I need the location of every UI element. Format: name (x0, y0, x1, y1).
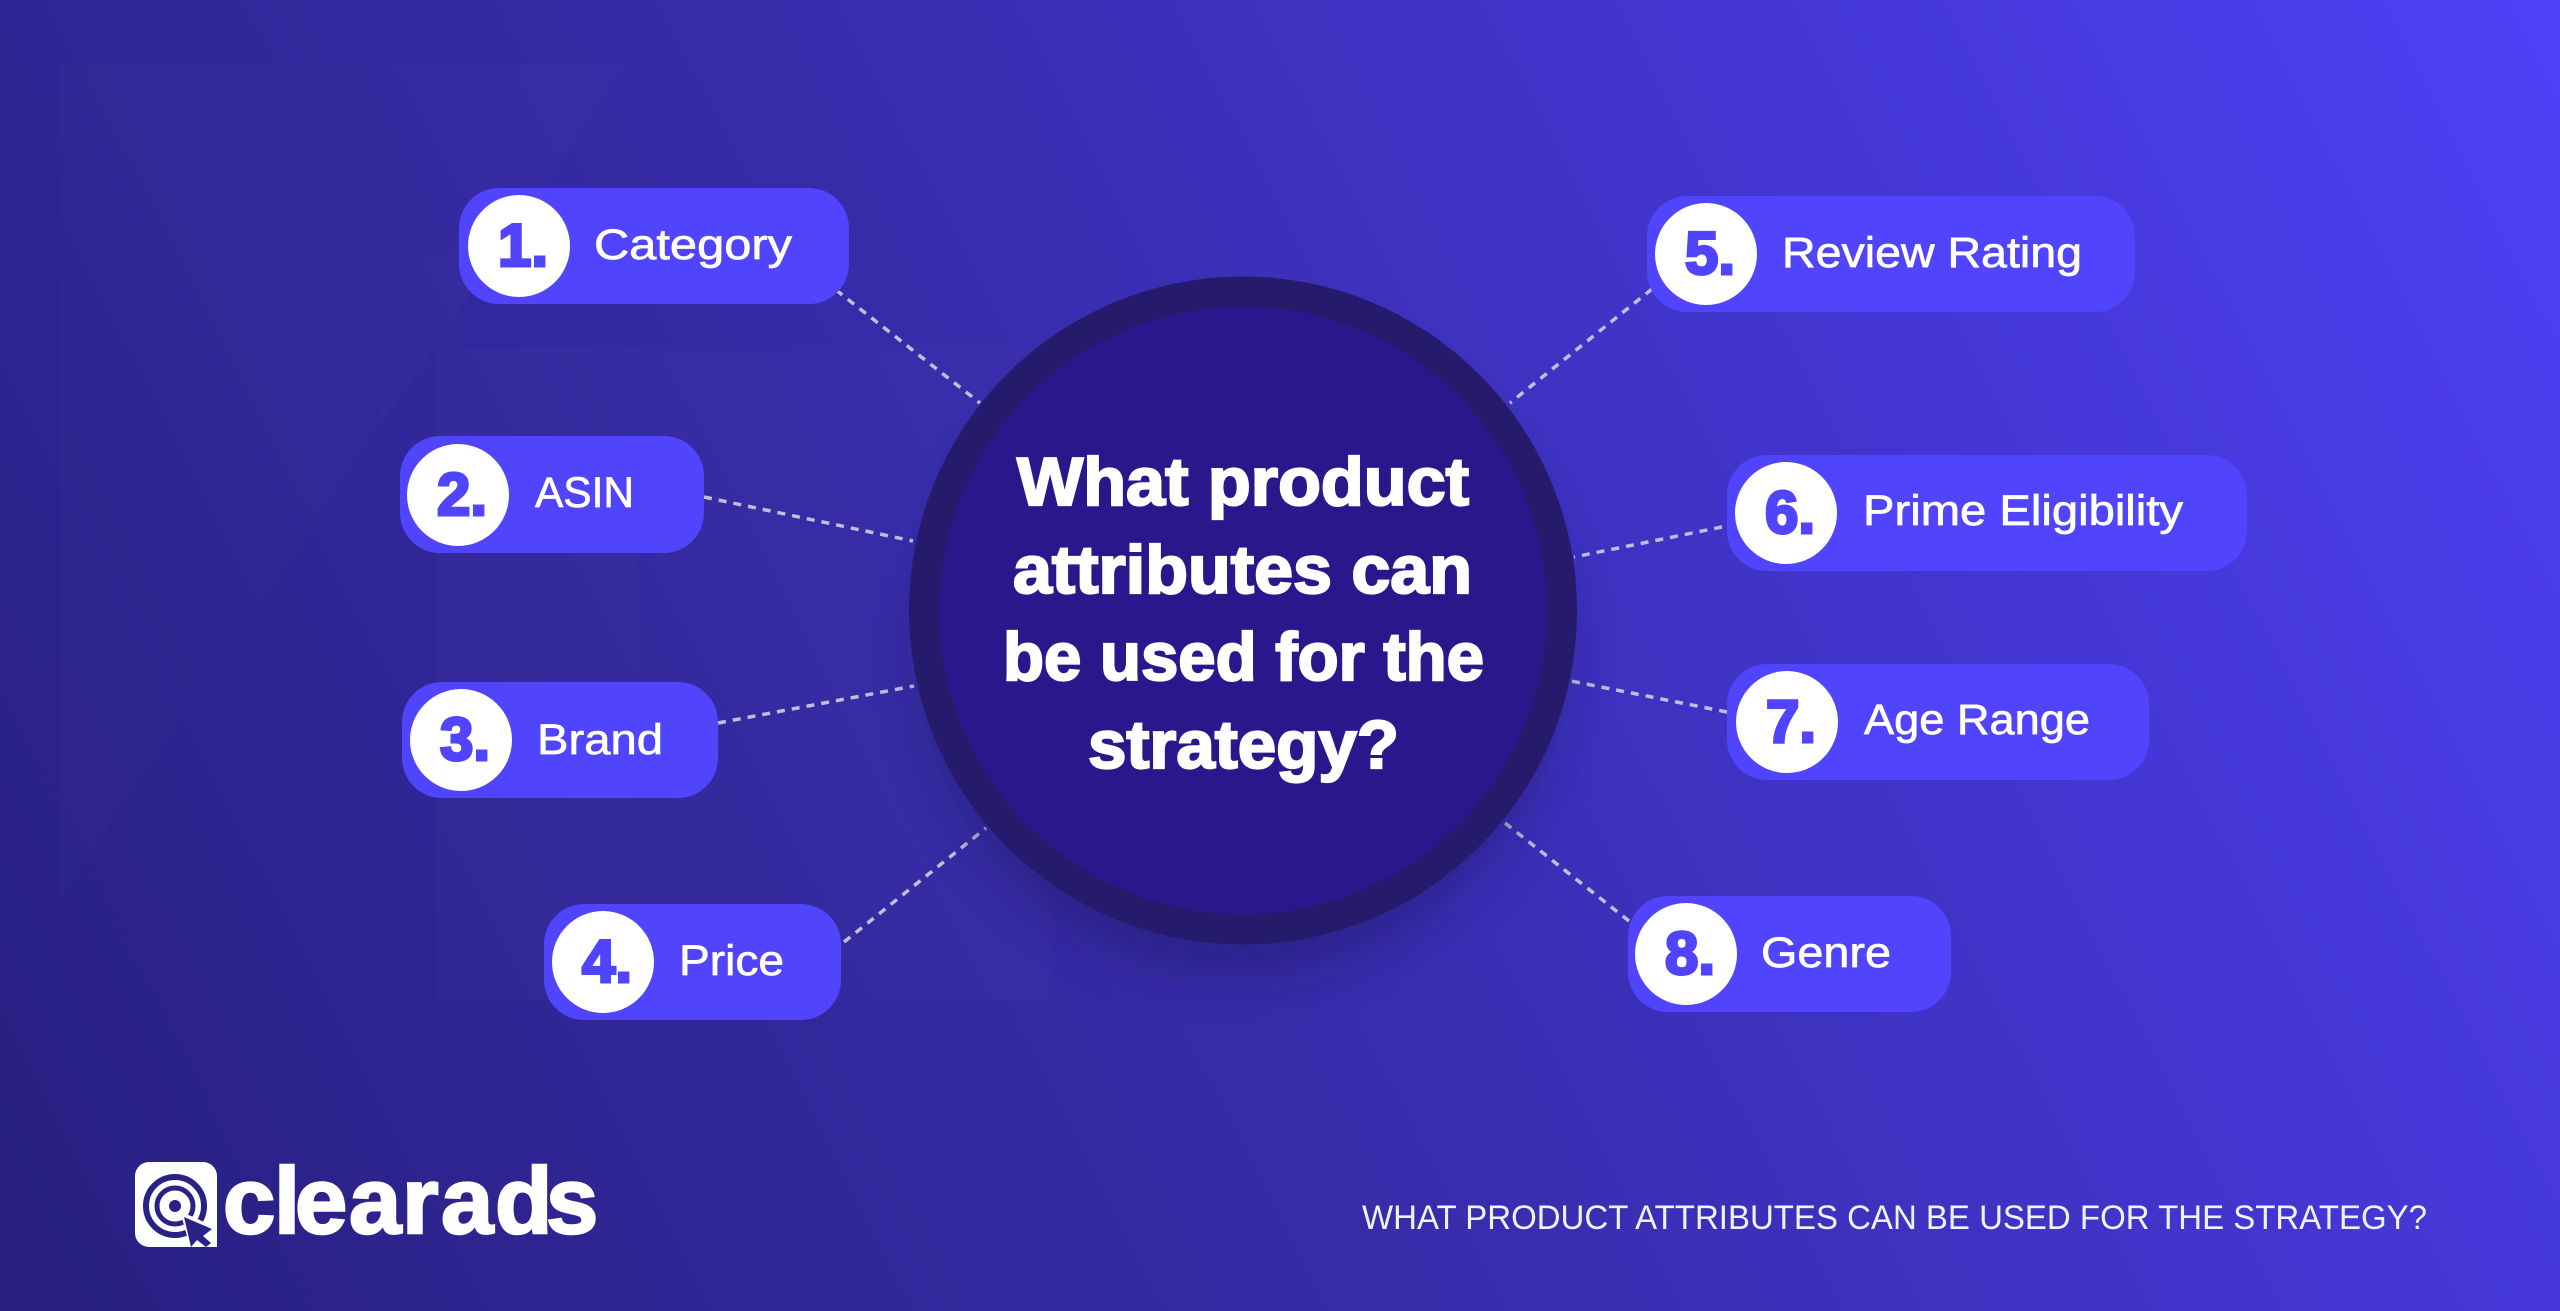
pill 1: Category: Category (594, 221, 793, 269)
dashed connectors (704, 289, 1727, 942)
logo (135, 1148, 598, 1253)
central title (1003, 444, 1484, 783)
central title: attributes can (1013, 532, 1472, 608)
background watermark shapes (60, 65, 1050, 1000)
pill 5: Review Rating: Review Rating (1782, 229, 2082, 277)
pill 7: Age Range: Age Range (1864, 696, 2090, 744)
central title: What product (1017, 444, 1469, 520)
footer caption: WHAT PRODUCT ATTRIBUTES CAN BE USED FOR THE STRATEGY? (1362, 1199, 2427, 1237)
pill 8: Genre (1628, 896, 1951, 1012)
pill 6: Prime Eligibility (1727, 455, 2247, 571)
pill 2: ASIN (400, 436, 704, 553)
wordmark: clearads (223, 1148, 598, 1253)
pill 5: Review Rating: 5. (1685, 220, 1735, 287)
pill 2: ASIN: 2. (437, 461, 487, 528)
pill 5: Review Rating (1647, 196, 2135, 312)
icon: target with cursor (135, 1162, 217, 1247)
pill 6: Prime Eligibility: 6. (1765, 479, 1815, 546)
pill 7: Age Range (1727, 664, 2149, 780)
pill 4: Price: Price (679, 937, 784, 985)
pill 2: ASIN: ASIN (535, 469, 634, 517)
central circle (909, 276, 1577, 973)
pill 1: Category (459, 188, 849, 304)
pill 3: Brand (402, 682, 718, 798)
pill 4: Price (544, 904, 841, 1020)
central title: be used for the (1003, 619, 1484, 695)
pill 3: Brand: Brand (537, 716, 663, 764)
pill 4: Price: 4. (582, 928, 632, 995)
pill 8: Genre: Genre (1761, 929, 1891, 977)
pill 7: Age Range: 7. (1766, 688, 1816, 755)
central title: strategy? (1088, 707, 1399, 783)
pill 6: Prime Eligibility: Prime Eligibility (1863, 487, 2184, 535)
pill 1: Category: 1. (498, 212, 548, 279)
pill 8: Genre: 8. (1665, 920, 1715, 987)
pill 3: Brand: 3. (440, 706, 490, 773)
